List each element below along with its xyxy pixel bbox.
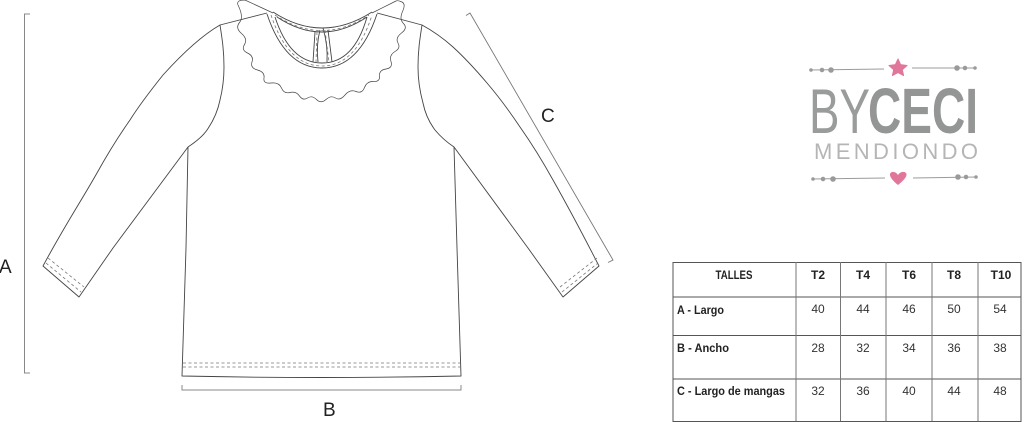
ruffled collar	[238, 0, 405, 102]
back neck inner	[277, 17, 367, 32]
row A - Largo: 54	[993, 302, 1007, 316]
logo heart	[890, 172, 907, 185]
logo wordmark BY: BY	[809, 77, 870, 147]
label C: C	[541, 106, 555, 127]
placket	[313, 28, 332, 62]
front neck inner	[275, 17, 367, 63]
row B - Ancho: 34	[902, 341, 916, 355]
table header: T10	[991, 268, 1012, 282]
measurement bracket B	[182, 385, 461, 390]
logo	[809, 59, 978, 185]
label B: B	[323, 400, 336, 421]
row B - Ancho: B - Ancho	[677, 341, 729, 355]
table grid	[673, 262, 1021, 422]
row C - Largo de mangas: 32	[811, 384, 825, 398]
body sides and hem	[182, 147, 461, 378]
garment: long sleeve shirt line drawing	[43, 0, 599, 378]
table header: T8	[947, 268, 961, 282]
measurement bracket C	[466, 13, 613, 262]
row C - Largo de mangas: 44	[947, 384, 961, 398]
logo wordmark MENDIONDO: MENDIONDO	[814, 139, 978, 164]
row B - Ancho: 36	[947, 341, 961, 355]
row A - Largo: 40	[811, 302, 825, 316]
stitching lines	[46, 15, 598, 367]
row C - Largo de mangas	[677, 384, 1007, 398]
logo top ornament	[810, 66, 976, 72]
row B - Ancho: 38	[993, 341, 1007, 355]
row A - Largo: 44	[856, 302, 870, 316]
row C - Largo de mangas: C - Largo de mangas	[677, 384, 785, 398]
size table	[673, 262, 1021, 422]
row B - Ancho: 28	[811, 341, 825, 355]
shoulders	[220, 13, 422, 25]
row A - Largo: 50	[947, 302, 961, 316]
logo wordmark CECI: CECI	[868, 75, 978, 147]
row B - Ancho: 32	[856, 341, 870, 355]
back neck	[273, 12, 372, 28]
logo star	[889, 59, 907, 76]
table header: T6	[902, 268, 916, 282]
left sleeve	[43, 25, 224, 297]
row C - Largo de mangas: 48	[993, 384, 1007, 398]
row A - Largo: A - Largo	[677, 303, 724, 317]
row B - Ancho	[677, 341, 1007, 355]
logo bottom ornament	[812, 175, 977, 181]
table header: T4	[856, 268, 870, 282]
table header: T2	[811, 268, 825, 282]
right sleeve	[418, 25, 599, 297]
table header: TALLES	[716, 268, 752, 282]
row A - Largo: 46	[902, 302, 916, 316]
row A - Largo	[677, 302, 1007, 317]
measurement bracket A	[24, 14, 30, 373]
row C - Largo de mangas: 36	[856, 384, 870, 398]
row C - Largo de mangas: 40	[902, 384, 916, 398]
front neck outer	[267, 14, 377, 68]
table header	[716, 268, 1012, 282]
